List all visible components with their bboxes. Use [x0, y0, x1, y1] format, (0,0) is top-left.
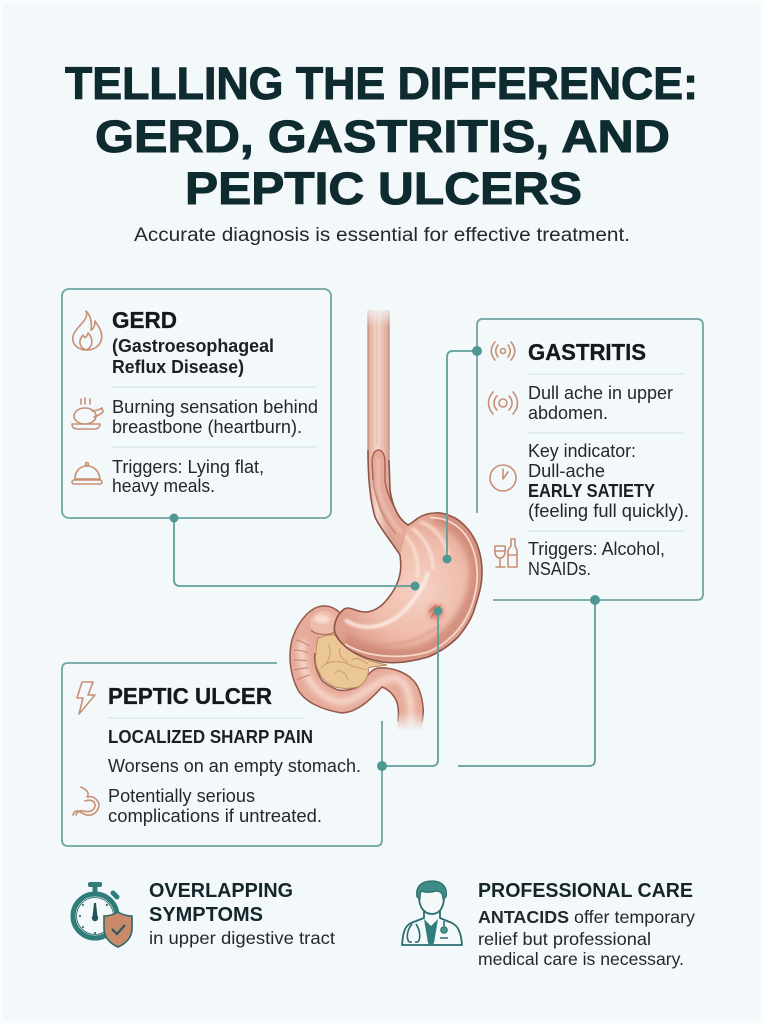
stomach body — [334, 450, 482, 663]
panel: peptic ulcer — [62, 663, 382, 846]
symptom text: abdomen. — [528, 403, 608, 423]
footer: overlapping symptoms — [73, 880, 335, 948]
localized sharp pain: LOCALIZED SHARP PAIN — [108, 727, 313, 747]
ulcer spot — [429, 605, 443, 619]
icon: lightning bolt — [77, 682, 95, 714]
duodenum — [290, 606, 423, 730]
title: TELLLING THE DIFFERENCE: — [65, 58, 698, 109]
footer text: in upper digestive tract — [149, 928, 335, 948]
symptom text: Dull ache in upper — [528, 383, 673, 403]
pylorus bulge — [310, 611, 337, 634]
GERD heading — [112, 307, 274, 377]
icon: stopwatch and shield — [73, 882, 132, 947]
key indicator text: Key indicator: — [528, 441, 636, 461]
symptom text — [112, 397, 318, 437]
complications text: complications if untreated. — [108, 806, 322, 826]
footer text: relief but professional — [478, 929, 651, 949]
symptom text: Burning sensation behind — [112, 397, 318, 417]
subtitle: Accurate diagnosis is essential for effective treatment. — [134, 225, 630, 246]
icon: cloche — [72, 462, 102, 484]
trigger text: Triggers: Lying flat, — [112, 457, 264, 477]
footer text: PROFESSIONAL CARE — [478, 880, 693, 902]
peptic heading: PEPTIC ULCER — [108, 683, 272, 709]
icon: clock — [490, 465, 516, 491]
connector: GERD to stomach — [170, 514, 420, 590]
GERD heading: GERD — [112, 307, 177, 333]
title: GERD, GASTRITIS, AND — [95, 111, 670, 162]
complications text — [108, 786, 322, 826]
icon: flame — [73, 311, 102, 350]
footer text — [149, 880, 335, 948]
bottom fade — [392, 712, 428, 731]
icon: stomach outline — [73, 787, 99, 815]
gastritis heading: GASTRITIS — [528, 339, 646, 365]
GERD heading: Reflux Disease) — [112, 357, 244, 377]
icon: pain waves — [488, 392, 518, 414]
trigger text — [112, 457, 264, 496]
symptom text: breastbone (heartburn). — [112, 417, 302, 437]
symptom text — [528, 383, 673, 423]
trigger text: heavy meals. — [112, 476, 215, 496]
esophagus lower tube — [372, 450, 410, 545]
key indicator text — [528, 441, 689, 521]
panel: gastritis — [477, 319, 703, 600]
icon: doctor — [402, 881, 462, 946]
pancreas — [315, 635, 387, 688]
icon: pain waves small — [491, 342, 515, 360]
connector: peptic ulcer to stomach — [377, 606, 442, 771]
GERD heading: (Gastroesophageal — [112, 336, 274, 356]
title — [65, 58, 698, 214]
key indicator text: Dull-ache — [528, 461, 605, 481]
trigger text: Triggers: Alcohol, — [528, 539, 665, 559]
icon: roast — [72, 398, 103, 429]
trigger text — [528, 539, 665, 579]
connector: gastritis bottom — [458, 595, 600, 766]
trigger text: NSAIDs. — [528, 559, 591, 579]
footer: professional care — [402, 880, 695, 969]
symptom text: Worsens on an empty stomach. — [108, 756, 361, 776]
key indicator text: EARLY SATIETY — [528, 481, 655, 501]
footer text: ANTACIDS offer temporary — [478, 907, 695, 927]
footer text: SYMPTOMS — [149, 904, 263, 926]
complications text: Potentially serious — [108, 786, 255, 806]
panel: GERD — [62, 289, 331, 518]
footer text: OVERLAPPING — [149, 880, 293, 902]
esophagus — [368, 310, 420, 555]
footer text: medical care is necessary. — [478, 949, 684, 969]
footer text — [478, 880, 695, 969]
connector: gastritis to stomach — [442, 346, 482, 564]
key indicator text: (feeling full quickly). — [528, 501, 689, 521]
title: PEPTIC ULCERS — [185, 163, 582, 214]
top fade — [364, 305, 393, 327]
illustration: stomach and esophagus — [290, 305, 482, 731]
icon: wine and bottle — [495, 539, 517, 567]
